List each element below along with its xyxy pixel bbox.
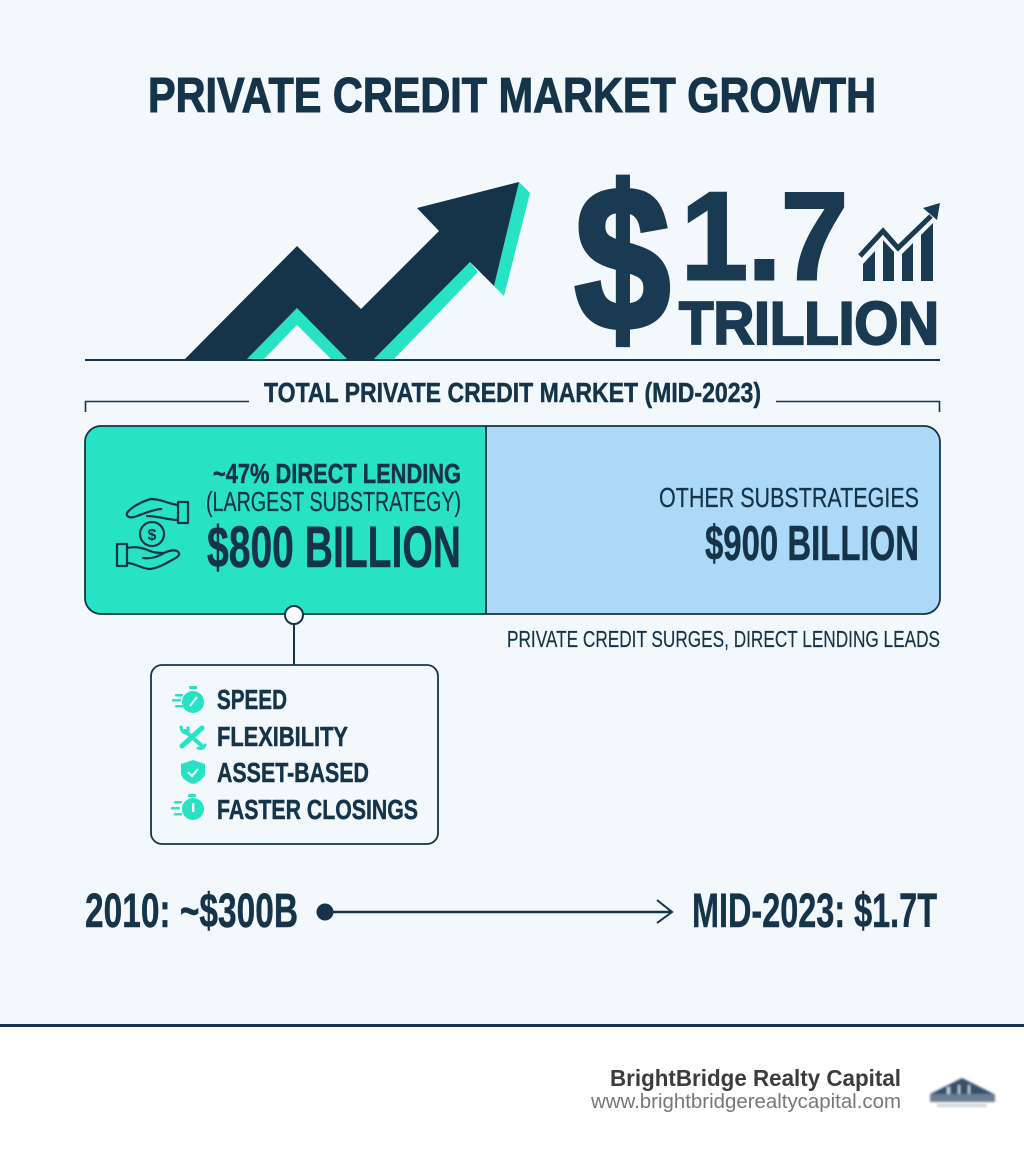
headline figure: $1.7 trillion (575, 145, 939, 373)
bracket: total market span (86, 402, 940, 412)
company name: BrightBridge Realty Capital (610, 1065, 901, 1091)
segment: direct lending (85, 426, 486, 614)
panel: benefits of direct lending (151, 665, 438, 844)
icon: speed stopwatch (172, 686, 204, 713)
other substrategies value: $900 BILLION (705, 517, 919, 571)
benefit: faster closings: FASTER CLOSINGS (217, 794, 418, 825)
other substrategies label: OTHER SUBSTRATEGIES (659, 482, 919, 513)
bracket label: TOTAL PRIVATE CREDIT MARKET (MID-2023) (264, 377, 761, 408)
baseline rule (85, 359, 940, 361)
icon: mini bar chart with rising arrow (860, 203, 940, 281)
benefit: asset-based: ASSET-BASED (217, 757, 369, 788)
icon: closing stopwatch (171, 794, 204, 820)
coin dollar sign: $ (148, 527, 156, 544)
direct lending labels: ~47% DIRECT LENDING (213, 458, 461, 489)
logo (930, 1078, 995, 1107)
direct lending sublabel: (LARGEST SUBSTRATEGY) (206, 486, 461, 517)
footer (0, 1024, 1024, 1154)
stacked market bar (85, 426, 940, 614)
headline figure: $1.7 trillion: 1.7 (681, 168, 848, 306)
bar outline and divider (85, 426, 940, 614)
headline figure: $1.7 trillion: TRILLION (679, 290, 939, 357)
segment: other substrategies (486, 426, 940, 614)
icon: crossed tools (181, 727, 205, 749)
direct lending value: $800 BILLION (207, 515, 461, 580)
title: PRIVATE CREDIT MARKET GROWTH (148, 69, 876, 123)
icon: hands holding a coin (117, 499, 188, 569)
benefit: speed: SPEED (217, 684, 287, 715)
icon: shield with check (181, 760, 205, 784)
growth arrow (184, 182, 530, 360)
benefit: flexibility: FLEXIBILITY (217, 721, 348, 752)
timeline arrow (316, 900, 672, 923)
headline figure: $1.7 trillion: $ (575, 145, 670, 373)
timeline start label: 2010: ~$300B (85, 885, 298, 938)
connector from bar to benefits box (285, 606, 303, 665)
company website: www.brightbridgerealtycapital.com (590, 1091, 901, 1113)
